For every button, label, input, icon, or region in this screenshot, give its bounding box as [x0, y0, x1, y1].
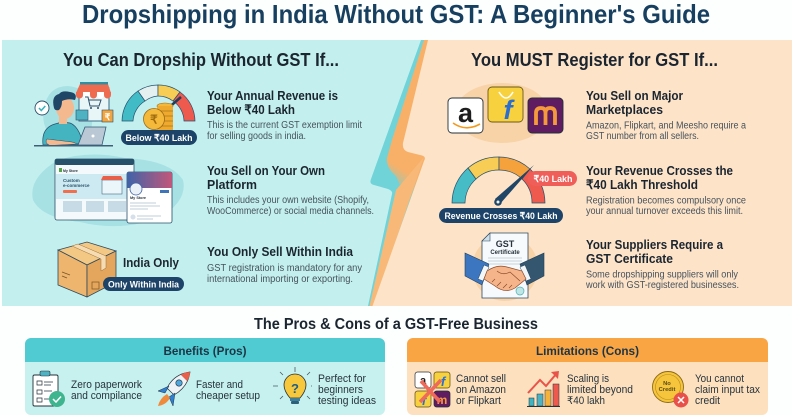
- text: supplier certificate: [585, 237, 739, 291]
- text: perfect for beginners: [318, 373, 376, 407]
- text: own platform: This includes your own website (Shopify,: [207, 195, 369, 206]
- icon: limited growth chart: [527, 371, 560, 406]
- text: revenue threshold: your annual turnover exceeds this limit.: [586, 206, 743, 217]
- text: major marketplaces: Marketplaces: [586, 102, 663, 117]
- icon: crossed marketplaces: f: [422, 393, 428, 408]
- heading: must register: You MUST Register for GST If...: [471, 49, 718, 70]
- icon: crossed marketplaces: a: [420, 375, 427, 387]
- pill: below 40 lakh: [121, 130, 197, 145]
- icon: clipboard checklist: [33, 371, 65, 407]
- pill: 40 lakh red: ₹40 Lakh: [534, 173, 573, 184]
- icon: revenue gauge with coins: [122, 85, 195, 134]
- text: annual revenue: Below ₹40 Lakh: [207, 102, 295, 117]
- icon: idea bulb: ?: [291, 381, 299, 396]
- label: India Only: India Only: [123, 255, 180, 270]
- text: perfect for beginners: beginners: [318, 384, 363, 396]
- icon: own store website and social profile: [32, 154, 184, 226]
- text: own platform: You Sell on Your Own: [207, 163, 325, 178]
- panel: must register for GST: [369, 40, 792, 306]
- panel: benefits: [25, 338, 385, 415]
- icon: GST certificate handshake: GST: [496, 239, 515, 249]
- text: no input tax credit: credit: [695, 395, 720, 407]
- text: no input tax credit: You cannot: [695, 373, 744, 385]
- text: annual revenue: This is the current GST exemption limit: [207, 120, 362, 131]
- panel: limitations: [407, 338, 768, 415]
- icon: seller at laptop with shop: ₹: [105, 112, 111, 122]
- icon: gauge crossing threshold: [452, 157, 545, 206]
- limitations header: Limitations (Cons): [536, 344, 639, 358]
- icon: crossed marketplaces: m: [437, 393, 447, 407]
- text: no input tax credit: claim input tax: [695, 384, 761, 396]
- text: revenue threshold: [586, 163, 747, 217]
- icon: rocket: [158, 372, 190, 406]
- heading: you can dropship: You Can Dropship Without GST If...: [63, 49, 339, 70]
- text: perfect for beginners: testing ideas: [318, 395, 376, 407]
- text: faster setup: Faster and: [196, 379, 243, 391]
- text: cannot sell on Amazon: Cannot sell: [456, 373, 506, 385]
- icon: own store website and social profile: e-commerce: [63, 183, 90, 188]
- pill: revenue crosses 40 lakh: [439, 208, 563, 223]
- text: supplier certificate: Some dropshipping suppliers will only: [586, 270, 738, 280]
- text: sell within India: GST registration is mandatory for any: [207, 263, 362, 274]
- icon: marketplaces logos: a: [458, 98, 474, 128]
- benefits header: Benefits (Pros): [164, 344, 246, 358]
- icon: marketplaces logos: f: [504, 95, 516, 125]
- icon: idea bulb: [273, 367, 312, 404]
- icon: marketplaces logos: [448, 83, 563, 143]
- text: zero paperwork: and compilance: [71, 390, 142, 402]
- text: annual revenue: for selling goods in india.: [207, 131, 306, 142]
- icon: seller at laptop with shop: [34, 82, 113, 146]
- icon: GST certificate handshake: [465, 233, 544, 301]
- text: own platform: WooCommerce) or social media channels.: [207, 206, 374, 217]
- icon: own store website and social profile: Custom: [63, 178, 80, 183]
- text: no input tax credit: [695, 373, 761, 407]
- text: sell within India: international importing or exporting.: [207, 274, 353, 285]
- text: revenue threshold: Your Revenue Crosses the: [586, 163, 733, 178]
- panel: can dropship without GST: [2, 40, 432, 306]
- text: annual revenue: Your Annual Revenue is: [207, 88, 338, 103]
- text: zero paperwork: [71, 379, 143, 402]
- icon: crossed marketplaces: f: [441, 374, 447, 389]
- text: cannot sell on Amazon: or Flipkart: [456, 395, 501, 407]
- icon: GST certificate handshake: Certificate: [490, 250, 520, 256]
- text: cannot sell on Amazon: on Amazon: [456, 384, 506, 396]
- text: supplier certificate: work with GST-registered businesses.: [585, 280, 739, 291]
- text: own platform: [207, 163, 374, 217]
- text: scaling limited: Scaling is: [567, 373, 609, 385]
- text: major marketplaces: You Sell on Major: [586, 88, 683, 103]
- icon: own store website and social profile: My Store: [63, 169, 78, 173]
- icon: cardboard box: [58, 242, 116, 297]
- text: sell within India: [207, 244, 362, 285]
- icon: crossed marketplaces: [415, 372, 450, 408]
- icon: own store website and social profile: My Store: [130, 196, 146, 200]
- text: major marketplaces: Amazon, Flipkart, and Meesho require a: [586, 120, 746, 132]
- heading: pros and cons: The Pros & Cons of a GST-Free Business: [254, 316, 538, 333]
- text: supplier certificate: GST Certificate: [586, 251, 673, 266]
- pill: below 40 lakh: Below ₹40 Lakh: [126, 132, 193, 143]
- text: zero paperwork: Zero paperwork: [71, 379, 143, 391]
- text: faster setup: cheaper setup: [196, 390, 260, 402]
- text: scaling limited: limited beyond: [567, 384, 633, 396]
- text: annual revenue: [207, 88, 362, 142]
- text: supplier certificate: Your Suppliers Require a: [586, 237, 724, 252]
- icon: no credit coin: No: [663, 381, 671, 387]
- text: revenue threshold: Registration becomes compulsory once: [586, 196, 747, 206]
- text: perfect for beginners: Perfect for: [318, 373, 366, 385]
- text: own platform: Platform: [207, 177, 257, 192]
- text: cannot sell on Amazon: [456, 373, 506, 407]
- pill: only within India: Only Within India: [108, 278, 180, 290]
- icon: no credit coin: Credit: [659, 387, 675, 393]
- text: revenue threshold: ₹40 Lakh Threshold: [586, 177, 698, 192]
- text: major marketplaces: GST number from all sellers.: [586, 131, 699, 142]
- text: scaling limited: ₹40 lakh: [567, 395, 605, 407]
- text: major marketplaces: [586, 88, 746, 142]
- text: scaling limited: [567, 373, 633, 407]
- text: sell within India: You Only Sell Within India: [207, 244, 354, 259]
- text: faster setup: [196, 379, 260, 402]
- icon: revenue gauge with coins: ₹: [150, 112, 158, 126]
- pill: 40 lakh red: [528, 171, 577, 186]
- pill: revenue crosses 40 lakh: Revenue Crosses ₹40 Lakh: [444, 210, 558, 221]
- icon: no credit coin: [652, 372, 688, 408]
